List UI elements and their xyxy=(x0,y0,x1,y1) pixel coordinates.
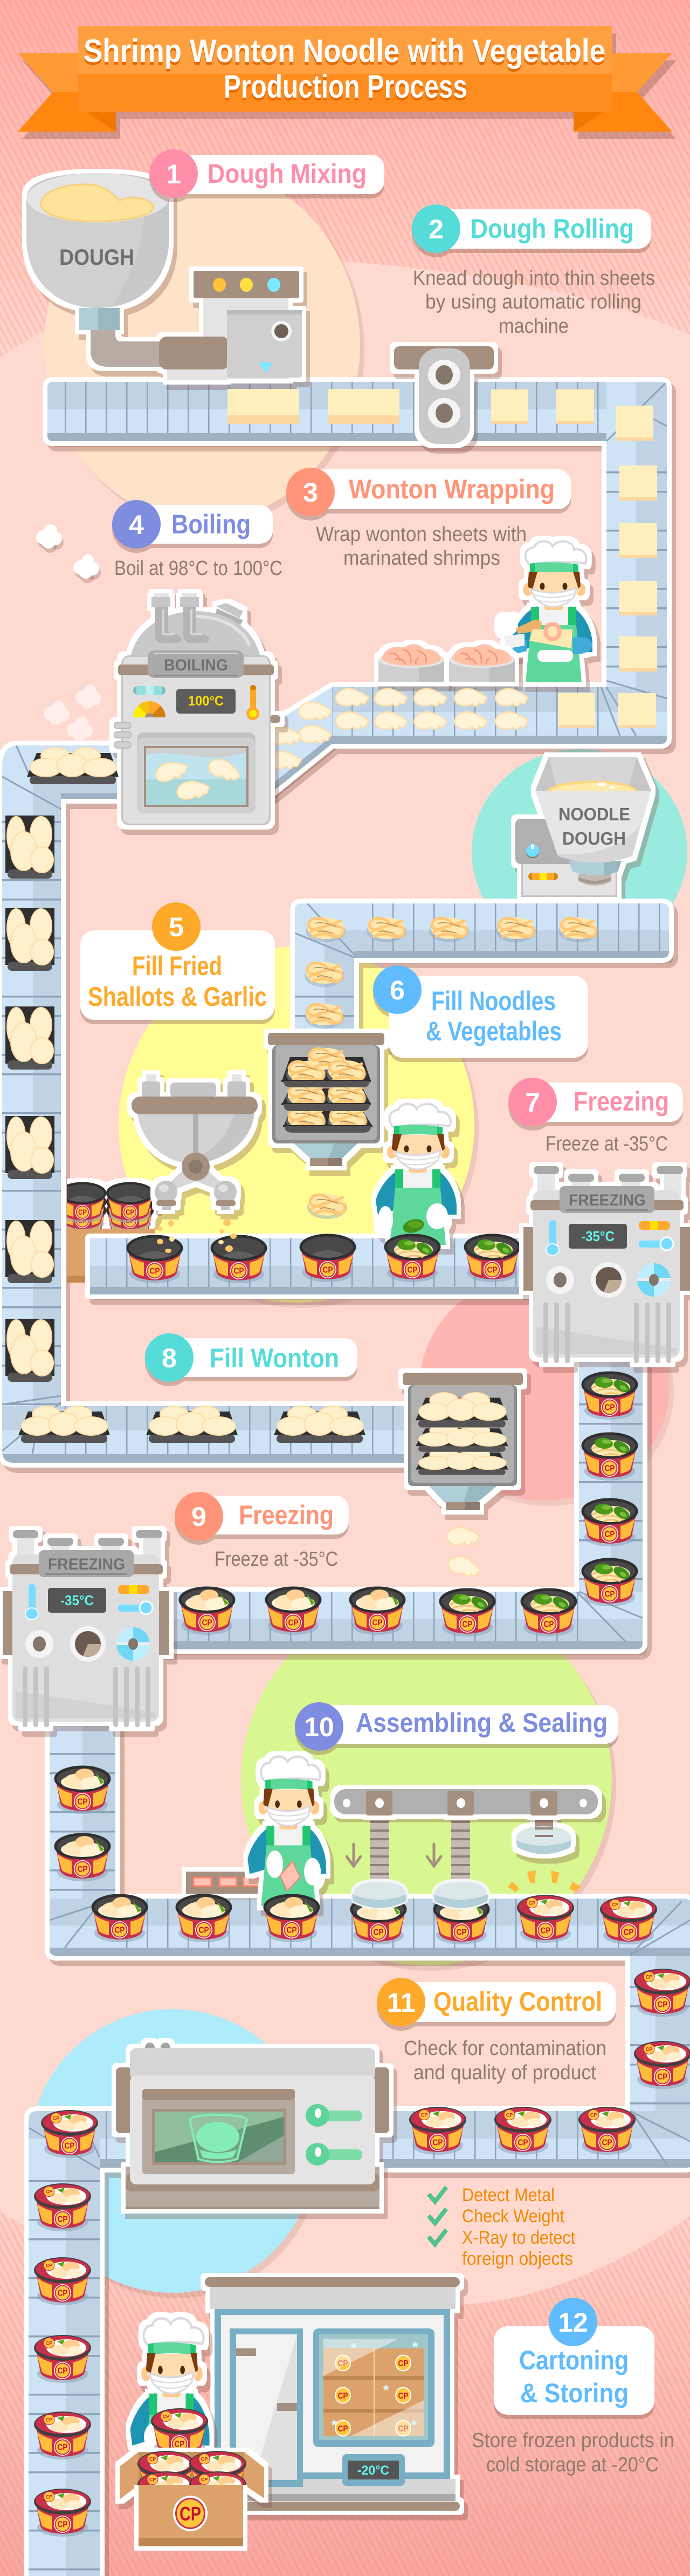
chef: assembling xyxy=(247,1757,326,1906)
storage window with cartons: * xyxy=(383,2382,389,2398)
label: boiling: BOILING xyxy=(164,656,228,674)
neck xyxy=(79,308,120,330)
step 8: fill wonton: Fill Wonton xyxy=(210,1343,339,1373)
screw shafts xyxy=(370,1814,553,1893)
step 9: freezing: 9 xyxy=(191,1502,206,1532)
pipe xyxy=(91,330,162,367)
background circle: quality control xyxy=(30,2009,320,2298)
mixer box xyxy=(227,310,302,378)
checklist text: foreign objects xyxy=(462,2249,573,2269)
conveyor: boiled wonton line xyxy=(2,745,419,1468)
storage window with cartons: * xyxy=(412,2339,418,2355)
background circle: noodle dough xyxy=(472,749,687,954)
logo: CP xyxy=(173,2496,208,2531)
display: minus 20: -20°C xyxy=(357,2463,389,2478)
conveyor: noodle line xyxy=(295,903,673,1046)
step 9: freezing xyxy=(175,1492,349,1540)
checklist text: Detect Metal xyxy=(462,2185,555,2205)
carton box xyxy=(120,2452,264,2499)
label: noodle dough: NOODLE xyxy=(558,804,630,824)
label: dough: DOUGH xyxy=(59,244,134,270)
checklist text: X-Ray to detect xyxy=(462,2228,575,2248)
machine: rolling roller xyxy=(394,346,494,444)
step 11: quality control: 11 xyxy=(387,1988,415,2018)
step 2: dough rolling: Dough Rolling xyxy=(471,214,634,244)
storage window with cartons: * xyxy=(411,2417,417,2433)
step 5: fill fried shallots and garlic: 5 xyxy=(169,912,184,942)
step 3: wonton wrapping xyxy=(286,468,571,516)
text: rolling description: by using automatic rolling xyxy=(425,291,641,313)
step 12: cartoning and storing: 12 xyxy=(558,2307,588,2338)
step 4: boiling: Boiling xyxy=(171,509,251,539)
step 1: dough mixing: 1 xyxy=(166,159,181,189)
chef: noodles and vegetables xyxy=(376,1104,457,1245)
machine: sealing press xyxy=(334,1789,598,1893)
machine: quality control xyxy=(116,2043,389,2209)
step 11: quality control: Quality Control xyxy=(433,1986,602,2017)
chef: wonton wrapping xyxy=(499,542,592,682)
press plates xyxy=(352,1880,488,1908)
fried shallot bits above cups xyxy=(158,1220,231,1234)
thermometer xyxy=(246,685,259,720)
gauge xyxy=(133,701,165,717)
title text: Shrimp Wonton Noodle with Vegetable xyxy=(84,33,605,69)
step 12: cartoning and storing: Cartoning xyxy=(519,2345,629,2375)
tray 1 xyxy=(281,1048,371,1087)
text: storing description: Store frozen products in xyxy=(472,2429,674,2452)
display xyxy=(176,689,236,714)
step 10: assembling and sealing: 10 xyxy=(304,1712,334,1742)
text: rolling description: Knead dough into thin sheets xyxy=(413,267,655,290)
background circle: dough xyxy=(44,169,364,527)
shrimp bowl right xyxy=(449,644,515,682)
machine: noodle dough hopper xyxy=(515,757,651,897)
storage window with cartons: * xyxy=(351,2340,357,2356)
cup held by chef xyxy=(151,2408,208,2456)
carton front xyxy=(134,2485,247,2551)
text: quality control description xyxy=(404,2037,606,2084)
step 12: cartoning and storing xyxy=(494,2298,654,2415)
chef: cartoning xyxy=(130,2318,210,2481)
icon: check marks xyxy=(429,2187,446,2244)
conveyor: cup filling line xyxy=(90,1238,543,1300)
levers xyxy=(306,2104,362,2166)
press plate right xyxy=(516,1814,571,1854)
conveyor: frozen noodle line xyxy=(156,1348,647,1655)
background circle: freezing xyxy=(419,1272,674,1506)
title ribbon xyxy=(18,26,677,139)
steam stack xyxy=(154,593,243,627)
conveyor: dough and wonton line xyxy=(47,382,671,799)
step 5: fill fried shallots and garlic xyxy=(80,902,275,1020)
text: wrapping description xyxy=(316,523,527,570)
cold storage xyxy=(205,2277,460,2511)
tank xyxy=(26,173,169,308)
tray 3 xyxy=(283,1108,372,1133)
xray window xyxy=(142,2089,295,2174)
step 9: freezing: Freezing xyxy=(239,1500,334,1530)
machine: freezing step 9 xyxy=(3,1530,169,1727)
step 7: freezing: Freezing xyxy=(574,1086,669,1116)
machine: boiling xyxy=(114,593,280,825)
label: freezing: FREEZING xyxy=(569,1191,646,1209)
step 6: fill noodles and vegetables xyxy=(373,965,588,1058)
storage door xyxy=(230,2328,303,2487)
cups in carton xyxy=(137,2451,246,2519)
text: freezing step 9 description: Freeze at -35°C xyxy=(215,1548,338,1571)
text: rolling description xyxy=(413,267,655,338)
title text: Production Process xyxy=(224,68,467,105)
wonton trays on left conveyor xyxy=(5,748,365,1443)
step 7: freezing xyxy=(508,1078,683,1126)
title text xyxy=(84,33,605,105)
step 10: assembling and sealing xyxy=(295,1702,618,1751)
sparks xyxy=(508,1871,581,1892)
wonton cups xyxy=(56,1767,488,1944)
boiler window xyxy=(137,732,256,813)
gloves xyxy=(378,1203,448,1234)
step 12: cartoning and storing: & Storing xyxy=(520,2378,629,2408)
step 6: fill noodles and vegetables: & Vegetables xyxy=(426,1016,562,1046)
display: minus 35: -35°C xyxy=(581,1228,615,1244)
step 1: dough mixing xyxy=(149,149,384,198)
knobs xyxy=(114,722,131,748)
noodles on conveyor xyxy=(305,917,598,1029)
icon: leaf xyxy=(402,1217,425,1235)
falling noodle xyxy=(307,1194,347,1219)
control panel xyxy=(194,271,299,298)
logo: CP: CP xyxy=(180,2503,201,2525)
step 3: wonton wrapping: 3 xyxy=(303,477,318,508)
display: minus 20 xyxy=(342,2454,405,2486)
step 6: fill noodles and vegetables: 6 xyxy=(390,975,405,1005)
hopper: wonton xyxy=(403,1373,523,1510)
step 1: dough mixing: Dough Mixing xyxy=(208,159,367,189)
step 11: quality control xyxy=(377,1978,616,2026)
connector xyxy=(159,337,229,369)
icon: water drop xyxy=(526,844,539,858)
sealed cups xyxy=(34,1895,690,2537)
wontons on conveyor xyxy=(268,689,528,769)
step 5: fill fried shallots and garlic: Fill Fried xyxy=(132,951,222,981)
steam puffs xyxy=(36,524,101,741)
cup stack and box xyxy=(60,1183,155,1283)
text: rolling description: machine xyxy=(499,315,569,338)
label: noodle dough: DOUGH xyxy=(562,828,626,848)
checklist text xyxy=(462,2185,575,2269)
machine: shallot and garlic filler xyxy=(132,1074,258,1210)
text: storing description: cold storage at -20°C xyxy=(486,2454,659,2476)
step 5: fill fried shallots and garlic: Shallots & Garlic xyxy=(88,982,267,1012)
cups on filling conveyor xyxy=(128,1234,519,1283)
background circle: filling xyxy=(119,947,479,1308)
step 8: fill wonton xyxy=(145,1333,357,1382)
step 7: freezing: 7 xyxy=(525,1087,540,1118)
sheets on conveyor xyxy=(227,389,657,728)
text: freezing step 7 description: Freeze at -35°C xyxy=(546,1133,668,1155)
storage window with cartons: * xyxy=(332,2417,337,2433)
tray 2 xyxy=(281,1085,371,1111)
label: noodle dough xyxy=(558,804,630,848)
background circle: assembling xyxy=(241,1594,616,1971)
hopper: noodles xyxy=(268,1033,384,1166)
shrimp bowl left xyxy=(378,644,444,682)
text: quality control description: Check for contamination xyxy=(404,2037,606,2060)
text: wrapping description: marinated shrimps xyxy=(343,547,500,570)
checklist text: Check Weight xyxy=(462,2206,564,2226)
step 2: dough rolling: 2 xyxy=(429,214,444,244)
display: 100°C xyxy=(188,694,224,709)
text: quality control description: and quality of product xyxy=(413,2061,596,2084)
gloves and sachet xyxy=(266,1851,321,1891)
gloves and shrimp card xyxy=(499,616,592,662)
press bar xyxy=(334,1789,598,1815)
dough xyxy=(40,184,154,222)
mixer column xyxy=(203,298,288,379)
arrow: press down right xyxy=(427,1844,441,1866)
cups descending from freezer xyxy=(180,1373,637,1636)
checklist xyxy=(429,2185,575,2269)
conveyor: assembling and quality line xyxy=(29,1721,690,2576)
step 8: fill wonton: 8 xyxy=(162,1343,177,1373)
step 4: boiling xyxy=(112,500,273,549)
label: freezing: FREEZING xyxy=(48,1556,125,1573)
machine: freezing step 7 xyxy=(523,1166,690,1363)
step 6: fill noodles and vegetables: Fill Noodles xyxy=(431,986,556,1016)
sachet tray xyxy=(186,1872,267,1894)
text: wrapping description: Wrap wonton sheets with xyxy=(316,523,527,546)
step 4: boiling: 4 xyxy=(129,510,144,540)
text: boiling description: Boil at 98°C to 100°C xyxy=(114,557,282,580)
storage window with cartons xyxy=(313,2328,434,2447)
text: storing description xyxy=(472,2429,674,2476)
step 3: wonton wrapping: Wonton Wrapping xyxy=(349,474,555,504)
display: minus 35: -35°C xyxy=(60,1592,94,1608)
step 10: assembling and sealing: Assembling & Sealing xyxy=(356,1708,608,1738)
step 2: dough rolling xyxy=(412,204,651,253)
arrow: press down left xyxy=(347,1844,361,1866)
machine: dough mixing xyxy=(26,173,302,380)
indicator xyxy=(528,873,558,880)
falling wontons xyxy=(446,1527,482,1579)
